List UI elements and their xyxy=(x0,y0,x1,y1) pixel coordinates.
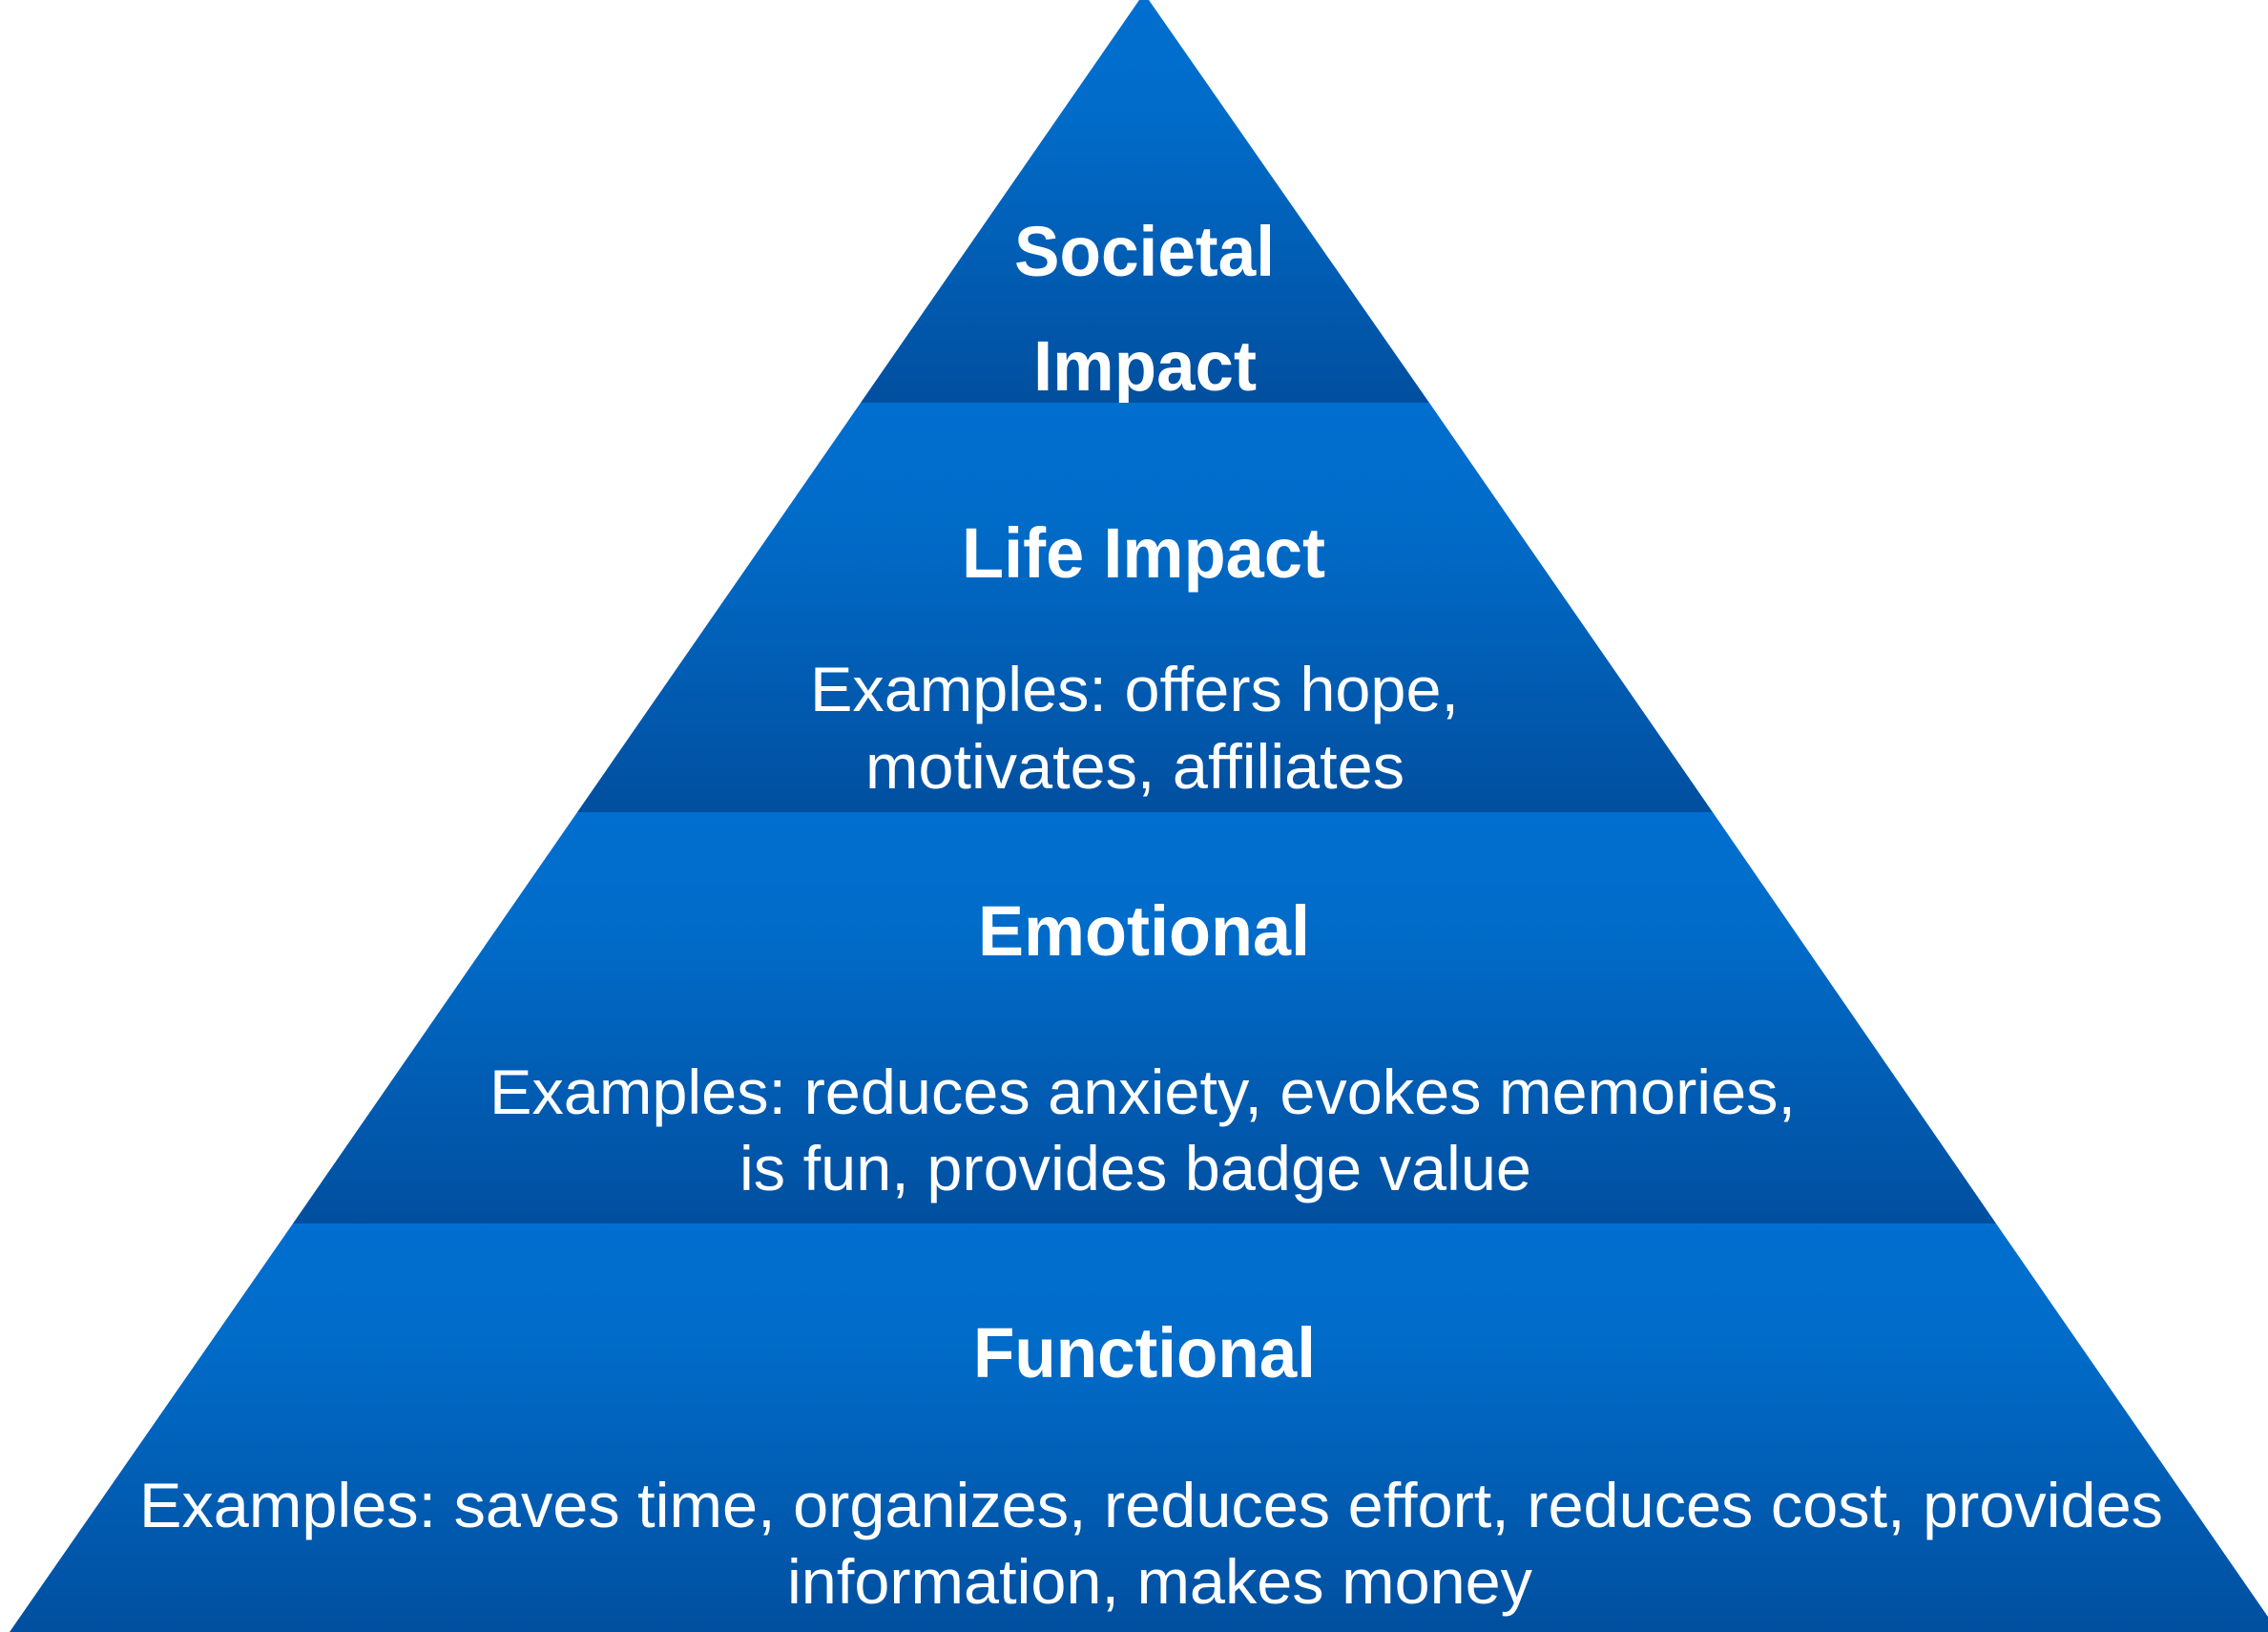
tier: emotional xyxy=(293,812,1996,1224)
tier: functional xyxy=(10,1224,2268,1632)
tier: societal impact xyxy=(861,0,1429,406)
tier: life impact xyxy=(577,403,1713,812)
tier: life impact: Life Impact xyxy=(962,513,1325,593)
tier: emotional: is fun, provides badge value xyxy=(739,1133,1531,1203)
tier: life impact: Examples: offers hope, xyxy=(810,654,1459,724)
tier: functional: information, makes money xyxy=(787,1546,1532,1617)
tier: functional: Functional xyxy=(973,1313,1316,1392)
tier: emotional: Emotional xyxy=(978,891,1310,971)
tier: life impact: motivates, affiliates xyxy=(865,731,1404,802)
tier: functional: Examples: saves time, organizes, reduces effort, reduces cost, provides xyxy=(139,1470,2163,1540)
tier: societal impact: Impact xyxy=(1033,326,1257,406)
tier: societal impact: Societal xyxy=(1014,212,1275,291)
tier: emotional: Examples: reduces anxiety, evokes memories, xyxy=(489,1057,1796,1127)
